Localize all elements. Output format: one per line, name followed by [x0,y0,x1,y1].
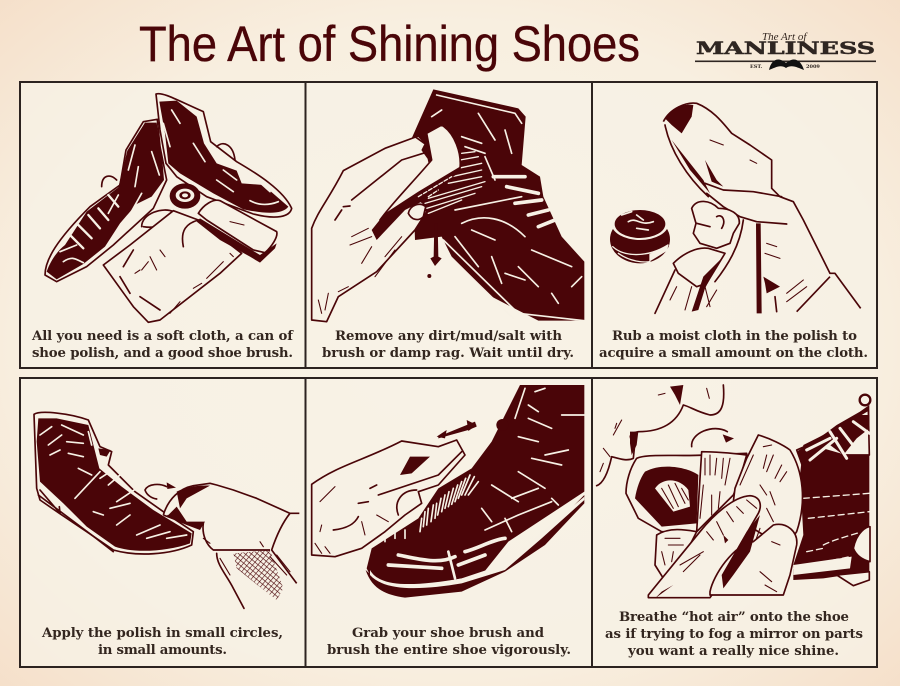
caption 2: Remove any dirt/mud/salt with [335,329,562,344]
illustration: man's face breathing on shoe, hand with cloth [597,385,870,598]
caption 6: Breathe “hot air” onto the shoe [619,610,849,625]
panel: step 1 what you need [20,82,305,368]
caption 1: shoe polish, and a good shoe brush. [32,346,293,361]
caption 6: as if trying to fog a mirror on parts [605,627,863,642]
logo: The Art of Manliness: EST. [750,64,762,70]
panel: step 2 remove dirt [306,82,591,368]
caption 3: acquire a small amount on the cloth. [599,346,868,361]
caption 4: in small amounts. [98,643,227,658]
caption 5: brush the entire shoe vigorously. [327,643,571,658]
caption 6: you want a really nice shine. [627,644,839,659]
caption 1: All you need is a soft cloth, a can of [31,329,294,344]
logo: The Art of Manliness: 2009 [806,64,820,70]
caption 5: Grab your shoe brush and [352,626,544,641]
logo: The Art of Manliness: The Art of [762,31,808,43]
panel: step 3 moisten cloth [592,82,877,368]
illustration: two shoes, polish can, brush and cloth [45,94,292,322]
title: The Art of Shining Shoes [139,16,640,72]
panel: step 4 apply polish [20,378,305,667]
illustration: hand brushing a shiny boot [312,385,584,598]
illustration: can of polish and hand holding a cloth [610,103,861,313]
illustration: boot being polished by a hand with a cloth [34,412,299,608]
caption 2: brush or damp rag. Wait until dry. [322,346,574,361]
logo: The Art of Manliness: MANLINESS [696,39,875,58]
caption 3: Rub a moist cloth in the polish to [612,329,857,344]
panel: step 5 brush [306,378,591,667]
logo: The Art of Manliness [695,31,876,70]
panel: step 6 breathe hot air [592,378,877,667]
illustration: hand wiping the boot with a rag [312,89,584,322]
caption 4: Apply the polish in small circles, [41,626,283,641]
